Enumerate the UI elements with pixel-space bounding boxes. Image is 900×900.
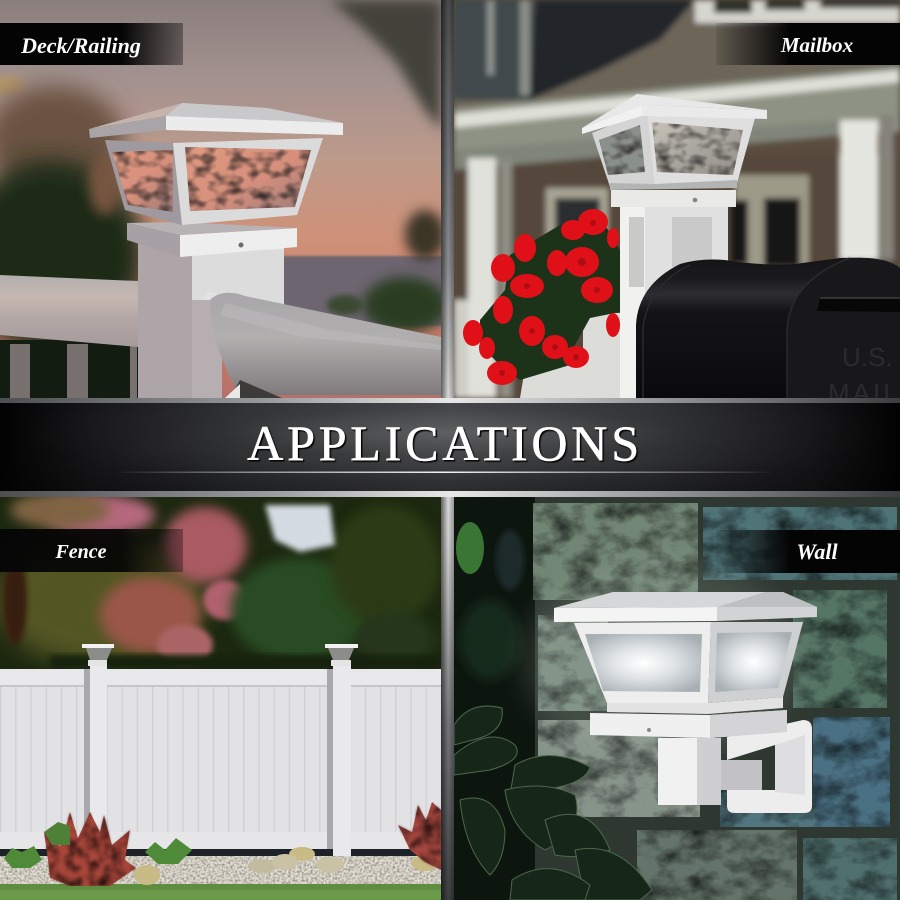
- label: Fence: Fence: [54, 541, 107, 563]
- label: Wall: [716, 530, 900, 573]
- mailbox: MAIL: [828, 378, 900, 408]
- left post lantern: [82, 644, 114, 666]
- gravel and lawn: [0, 849, 441, 900]
- foreground leaves: [454, 706, 652, 900]
- panel: fence: [0, 492, 441, 900]
- flower pot: [520, 313, 620, 398]
- mailbox: [636, 258, 900, 408]
- label: Deck/Railing: Deck/Railing: [20, 33, 141, 58]
- label: Fence: [0, 529, 183, 572]
- vinyl fence: [0, 666, 441, 857]
- label: Deck/Railing: [0, 23, 183, 65]
- label: Mailbox: [716, 23, 900, 65]
- dark foliage strip: [454, 497, 535, 900]
- post and trim: [611, 190, 736, 398]
- vertical divider between panels: [441, 0, 454, 900]
- panel: deck and railing: [0, 0, 447, 398]
- wall bracket: [658, 720, 812, 813]
- label: Mailbox: Mailbox: [780, 33, 853, 57]
- stones: [134, 847, 438, 885]
- blurred house facade: [454, 0, 900, 398]
- lantern cap: [582, 94, 767, 190]
- solar cap lantern: [89, 103, 343, 225]
- right post lantern: [325, 644, 358, 666]
- mailbox: U.S.: [842, 342, 893, 372]
- title: APPLICATIONS: [247, 415, 643, 471]
- foliage background: [0, 492, 441, 670]
- right railing: [210, 293, 441, 395]
- panel: mailbox: [454, 0, 900, 408]
- panel: wall: [454, 497, 900, 900]
- petunia flowers: [463, 209, 620, 385]
- glass panes: [112, 147, 311, 212]
- blurred hills and trees: [0, 0, 447, 398]
- post cap collar: [127, 222, 297, 257]
- glass panes: [599, 122, 743, 175]
- lantern glow on wall: [520, 560, 800, 760]
- title band: [0, 398, 900, 497]
- left railing: [0, 275, 138, 347]
- label: Wall: Wall: [796, 539, 838, 564]
- post: [138, 240, 284, 398]
- glass panes: [585, 632, 792, 692]
- lantern: [554, 592, 817, 738]
- shrubs: [4, 802, 441, 886]
- stone wall: [533, 503, 897, 900]
- railing balusters: [10, 344, 137, 398]
